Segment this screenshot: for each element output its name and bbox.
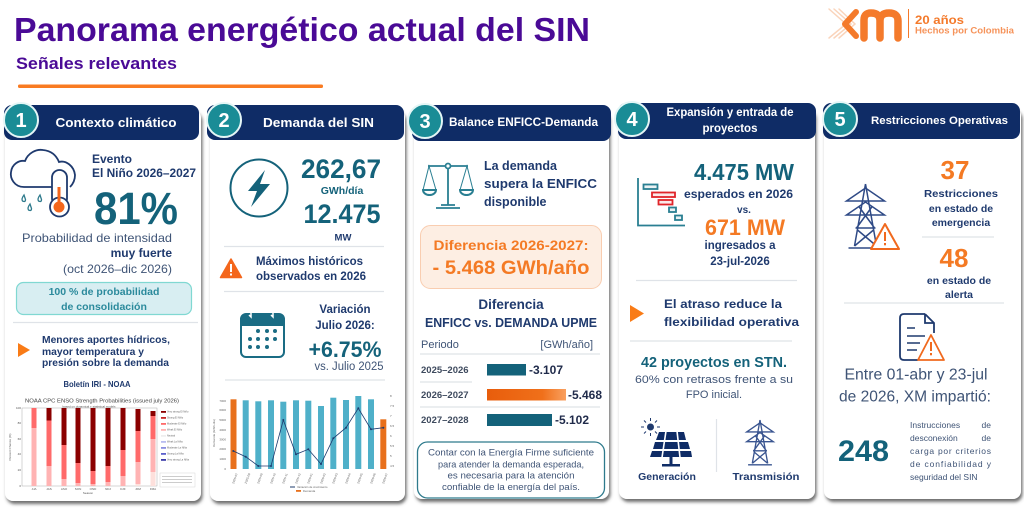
callout: consolidation <box>16 282 192 314</box>
chart: ENSO strength probabilities: 60 <box>18 437 21 441</box>
energy demand figure: 262,67 <box>301 154 381 184</box>
header 1 <box>4 103 199 140</box>
card 1 <box>5 110 201 501</box>
right axis: 4.5 <box>390 464 395 468</box>
row 2027-2028: 2027–2028 <box>421 415 469 426</box>
header 3: Balance ENFICC-Demanda <box>449 117 599 129</box>
header 4: proyectos <box>703 123 757 135</box>
chart: ENSO strength probabilities: NOAA CPC ENSO Strength Probabilities (issued july 2026) <box>25 398 179 404</box>
alert label <box>927 275 991 301</box>
variation heading: Variación <box>319 304 371 316</box>
panel 2: demanda del SIN <box>207 103 405 501</box>
panel 4: expansión y entrada de proyectos <box>615 102 816 499</box>
month axis: 2025-09 <box>256 472 264 484</box>
header 2: 2 <box>218 110 230 132</box>
panel 3: balance ENFICC-demanda <box>408 104 611 499</box>
transmission label: Transmisión <box>732 471 800 483</box>
projects headline: 42 proyectos en STN. <box>641 355 787 371</box>
month axis: 2026-06 <box>369 472 377 484</box>
row 2027-2028: -5.102 <box>555 413 589 427</box>
legend: Moderate La Niña <box>167 446 187 450</box>
entered label: 23-jul-2026 <box>710 256 770 268</box>
icon: calendar <box>241 311 284 357</box>
table header: Periodo <box>421 339 459 351</box>
left axis: 3000 <box>219 438 226 442</box>
variation figure: +6.75% <box>308 337 382 362</box>
legend: Very strong La Niña <box>167 458 190 462</box>
note box: Contar con la Energía Firme suficiente <box>428 448 594 458</box>
emergency label: emergencia <box>932 217 990 229</box>
generation label: Generación <box>638 471 696 483</box>
chart: ENSO strength probabilities: JAS <box>46 487 52 491</box>
emergency label: Restricciones <box>924 188 998 200</box>
month axis: 2026-05 <box>356 472 364 484</box>
legend: Very strong El Niño <box>167 410 189 414</box>
month axis: 2026-03 <box>331 472 339 484</box>
historic maximum text <box>256 256 366 283</box>
historic maximum text: observados en 2026 <box>256 271 366 283</box>
right axis: 6 <box>390 434 392 438</box>
icon: scales <box>423 164 473 208</box>
note box: para atender la demanda esperada, <box>438 460 584 470</box>
arrow 1 <box>18 343 30 357</box>
header 5: 5 <box>834 109 846 131</box>
chart legend <box>290 485 328 493</box>
chart: monthly demand <box>212 394 395 493</box>
note box <box>418 442 604 498</box>
emergency label <box>924 188 998 229</box>
card 2 <box>210 110 405 501</box>
table header <box>421 339 593 351</box>
header 3 <box>408 104 611 141</box>
icon: gantt chart <box>638 178 685 226</box>
statement: La demanda <box>484 159 558 173</box>
right axis: 5 <box>390 454 392 458</box>
difference heading: ENFICC vs. DEMANDA UPME <box>425 315 597 330</box>
chart: monthly demand: Demanda (GWh-día) <box>212 419 216 447</box>
icon: solar panel <box>641 418 692 466</box>
header 1: 1 <box>15 110 27 132</box>
header 4 <box>615 102 816 139</box>
right axis <box>390 394 395 468</box>
row 2025-2026 <box>421 363 563 377</box>
event heading: Evento <box>92 152 132 166</box>
alert count: 48 <box>940 243 968 273</box>
expected label: esperados en 2026 <box>684 189 793 201</box>
left axis: 6000 <box>219 408 226 412</box>
callout: difference 2026-2027: - 5.468 GWh/año <box>432 257 590 279</box>
header 3: 3 <box>419 111 431 133</box>
historic maximum text: Máximos históricos <box>256 256 363 268</box>
callout: consolidation: de consolidación <box>61 301 147 313</box>
left axis <box>219 399 226 471</box>
subtitle: Señales relevantes <box>16 54 177 73</box>
logo text: 20 años <box>915 13 964 27</box>
icon: cloud, rain and thermometer <box>11 150 75 216</box>
row 2025-2026: -3.107 <box>529 363 563 377</box>
orange title rule <box>18 84 323 88</box>
note box: confiable de la energía del país. <box>442 482 580 492</box>
icon: document with warning <box>900 314 944 360</box>
right axis: 8 <box>390 394 392 398</box>
chart: ENSO strength probabilities: DJF <box>120 487 126 491</box>
left axis: 0 <box>224 467 226 471</box>
bar chart: difference by period <box>420 363 602 427</box>
instructions text: carga por criterios <box>910 446 991 456</box>
icon: warning <box>220 259 242 278</box>
impacts text: presión sobre la demanda <box>42 357 169 369</box>
header 5 <box>823 102 1020 139</box>
legend: Strong La Niña <box>167 452 184 456</box>
instructions text: de <box>982 420 991 430</box>
line series <box>233 408 383 466</box>
entered label: ingresados a <box>705 240 776 252</box>
card 3 <box>414 110 609 499</box>
chart: ENSO strength probabilities: Season <box>83 491 93 495</box>
month axis <box>231 472 389 484</box>
chart: ENSO strength probabilities: JJA <box>31 487 37 491</box>
table header: [GWh/año] <box>540 339 593 351</box>
legend: Weak El Niño <box>167 428 183 432</box>
month axis: 2025-12 <box>294 472 302 484</box>
legend <box>160 410 195 487</box>
chart: ENSO strength probabilities: NDJ <box>105 487 111 491</box>
projects detail: FPO inicial. <box>686 389 742 401</box>
logo: XM 20 años <box>829 9 1015 38</box>
entered MW: 671 MW <box>705 215 785 240</box>
chart: ENSO strength probabilities: Percent Chance (%) <box>8 433 12 461</box>
instructions text <box>910 420 992 482</box>
icon: tower with warning <box>846 184 899 249</box>
left axis: 4000 <box>219 428 226 432</box>
chart: ENSO strength probabilities: 0 <box>19 484 21 488</box>
logo: XM 20 años: Hechos por Colombia <box>915 26 1015 36</box>
right axis: 7.5 <box>390 404 395 408</box>
header 1: Contexto climático <box>56 116 177 130</box>
delay text: flexibilidad operativa <box>664 315 799 329</box>
period statement: Entre 01-abr y 23-jul <box>844 366 988 384</box>
statement: supera la ENFICC <box>484 177 597 191</box>
row 2026-2027: -5.468 <box>568 388 602 402</box>
header 4: 4 <box>626 109 638 131</box>
columns <box>230 396 386 469</box>
month axis: 2026-07 <box>381 472 389 484</box>
emergency count: 37 <box>941 155 969 185</box>
chart: ENSO strength probabilities: FMA <box>150 487 156 491</box>
instructions text: desconexión <box>910 433 958 443</box>
logo divider <box>908 9 909 38</box>
entered label <box>705 240 776 268</box>
legend: Moderate El Niño <box>167 422 187 426</box>
month axis: 2026-04 <box>344 472 352 484</box>
panel 1: contexto climático <box>4 103 201 501</box>
emergency label: en estado de <box>929 203 993 215</box>
left axis: 7000 <box>219 399 226 403</box>
chart: ENSO strength probabilities: based on dynamical + statistical models <box>63 404 116 408</box>
icon: lightning bolt <box>230 160 288 216</box>
statement <box>484 159 597 209</box>
month axis: 2025-08 <box>244 472 251 484</box>
period statement: de 2026, XM impartió: <box>839 388 991 406</box>
statement: disponible <box>484 195 547 209</box>
instructions text: seguridad del SIN <box>910 472 978 482</box>
power demand figure: 12.475 <box>304 199 380 229</box>
projects detail: 60% con retrasos frente a su <box>635 374 793 386</box>
delay text: El atraso reduce la <box>664 297 782 311</box>
variation heading <box>315 304 375 332</box>
card 5 <box>824 108 1021 499</box>
alert label: alerta <box>945 289 973 301</box>
impacts text: mayor temperatura y <box>42 346 144 358</box>
month axis: 2025-10 <box>269 472 277 484</box>
chart: ENSO strength probabilities: ASO <box>61 487 68 491</box>
row 2027-2028 <box>421 413 589 427</box>
delay text <box>664 297 799 329</box>
row 2025-2026: 2025–2026 <box>421 365 469 376</box>
callout: consolidation: 100 % de probabilidad <box>49 286 159 298</box>
row 2026-2027 <box>421 388 602 402</box>
chart: ENSO strength probabilities: JFM <box>135 487 141 491</box>
title: Panorama energético actual del SIN <box>14 11 590 48</box>
probability description <box>22 231 172 276</box>
chart: ENSO strength probabilities <box>8 398 195 495</box>
right axis: 6.5 <box>390 424 395 428</box>
chart: ENSO strength probabilities: 40 <box>18 452 21 456</box>
month axis: 2026-02 <box>319 472 327 484</box>
variation heading: Julio 2026: <box>315 320 375 332</box>
instructions text: de confiabilidad y <box>910 459 992 469</box>
chart: ENSO strength probabilities: SON <box>75 487 81 491</box>
instructions text: de <box>982 433 991 443</box>
month axis: 2026-01 <box>306 472 314 484</box>
event heading: El Niño 2026–2027 <box>92 166 196 180</box>
bulletin label: Boletín IRI - NOAA <box>64 379 130 389</box>
header 2: Demanda del SIN <box>263 115 374 130</box>
callout: difference 2026-2027 <box>420 226 602 288</box>
period statement <box>839 366 991 406</box>
header 5: Restricciones Operativas <box>871 115 1008 127</box>
expected MW: 4.475 MW <box>694 159 794 185</box>
variation comparison: vs. Julio 2025 <box>314 361 384 373</box>
panel 5: restricciones operativas <box>823 102 1021 499</box>
month axis: 2025-11 <box>281 473 289 484</box>
card 4 <box>619 108 815 499</box>
right axis: 7 <box>390 414 392 418</box>
probability description: muy fuerte <box>111 246 172 260</box>
callout: difference 2026-2027: Diferencia 2026-2027: <box>434 237 588 253</box>
248 figure: 248 <box>838 435 889 468</box>
difference heading <box>425 297 597 330</box>
row 2026-2027: 2026–2027 <box>421 390 469 401</box>
header 4: Expansión y entrada de <box>666 107 794 119</box>
left axis: 1000 <box>219 457 226 461</box>
right axis: 5.5 <box>390 444 395 448</box>
legend: Strong El Niño <box>167 416 184 420</box>
arrow 4 <box>630 305 644 322</box>
note box: es necesaria para la atención <box>448 470 574 480</box>
projects detail <box>635 374 793 401</box>
vs: vs. <box>737 205 751 216</box>
chart legend: Demanda <box>303 489 316 493</box>
impacts text: Menores aportes hídricos, <box>42 334 170 346</box>
impacts text <box>42 334 170 369</box>
left axis: 2000 <box>219 447 226 451</box>
power unit: MW <box>335 232 351 244</box>
energy unit: GWh/día <box>321 185 363 197</box>
instructions text: Instrucciones <box>910 420 960 430</box>
difference heading: Diferencia <box>478 297 544 312</box>
header 2 <box>207 103 404 140</box>
chart: ENSO strength probabilities: 20 <box>18 468 21 472</box>
icon: transmission tower <box>747 420 773 465</box>
legend: Neutral <box>167 434 176 438</box>
alert label: en estado de <box>927 275 991 287</box>
left axis: 5000 <box>219 418 226 422</box>
chart: ENSO strength probabilities: OND <box>90 487 97 491</box>
chart legend: Variación de crecimiento <box>297 485 328 489</box>
stacked bars <box>32 408 156 486</box>
probability description: Probabilidad de intensidad <box>22 231 172 245</box>
legend: Weak La Niña <box>167 440 183 444</box>
probability description: (oct 2026–dic 2026) <box>63 262 172 276</box>
event heading <box>92 152 196 180</box>
chart: ENSO strength probabilities: 100 <box>16 406 21 410</box>
logo mark: xm <box>829 9 898 38</box>
month axis: 2025-07 <box>231 472 239 484</box>
81% probability: 81% <box>94 183 178 234</box>
chart: ENSO strength probabilities: 80 <box>18 421 21 425</box>
